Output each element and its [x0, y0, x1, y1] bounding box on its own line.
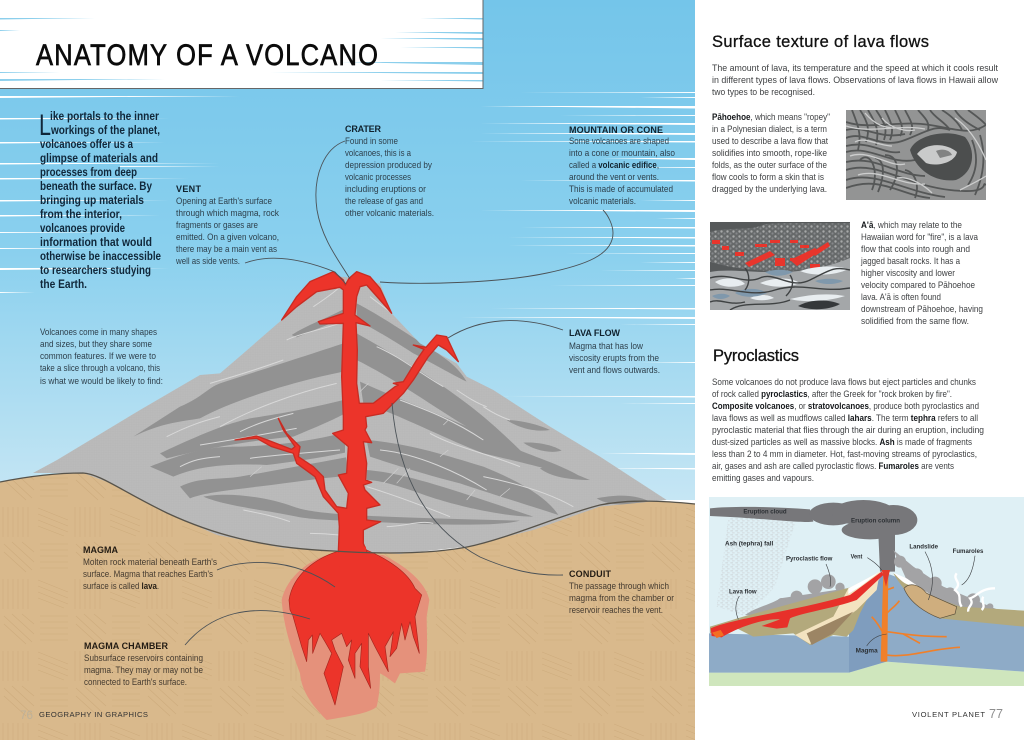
heading: surface texture: Surface texture of lava flows — [712, 33, 929, 51]
label: conduit: The passage through which — [569, 580, 669, 591]
label: magma — [83, 545, 217, 591]
text: aa: flow that cools into rough and — [861, 243, 970, 254]
text: pyroclastics: less than 2 to 4 mm in diameter. Hot, fast-moving streams of pyroclastics, — [712, 448, 977, 459]
label: lava flow: Magma that has low — [569, 340, 643, 351]
label: crater: the release of gas and — [345, 195, 423, 206]
left footer: 76 — [20, 708, 33, 722]
diagram labels: Pyroclastic flow — [786, 556, 832, 563]
text: pahoehoe: dragged by the underlying lava. — [712, 183, 827, 194]
intro text — [39, 109, 161, 291]
label: mountain or cone: called a volcanic edifice, — [569, 159, 659, 170]
label: mountain or cone: volcanic materials. — [569, 195, 636, 206]
text: pyroclastics: lava flows as well as mudflows called lahars. The term tephra refers to all — [712, 412, 978, 423]
intro text: L — [39, 109, 51, 142]
label: mountain or cone: This is made of accumulated — [569, 183, 673, 194]
label: mountain or cone: around the vent or vents. — [569, 171, 659, 182]
label: vent — [175, 184, 279, 266]
label: crater — [345, 124, 434, 218]
leader lines — [185, 141, 613, 645]
volcano cross-section — [33, 276, 666, 554]
label: magma chamber: magma. They may or may not be — [84, 664, 203, 675]
text: aa: velocity compared to Pāhoehoe — [861, 279, 975, 290]
fumaroles — [955, 573, 995, 612]
label: vent: there may be a main vent as — [176, 243, 277, 254]
label: lava flow: viscosity erupts from the — [569, 352, 659, 363]
intro text: volcanoes offer us a — [40, 138, 133, 151]
panel: title banner — [0, 0, 483, 88]
secondary intro text: take a slice through a volcano, this — [40, 362, 160, 373]
intro text: ike portals to the inner — [50, 110, 159, 123]
secondary intro text: Volcanoes come in many shapes — [40, 326, 157, 337]
left footer: GEOGRAPHY IN GRAPHICS — [39, 710, 148, 719]
text: pahoehoe — [712, 111, 830, 194]
intro text: volcanoes provide — [40, 222, 125, 235]
label: vent: through which magma, rock — [176, 207, 279, 218]
diagram labels: Fumaroles — [953, 548, 984, 555]
right clouds — [893, 550, 1000, 611]
magma chamber halo — [282, 553, 429, 720]
text: aa: lava. A'ā is often found — [861, 291, 941, 302]
label: vent: emitted. On a given volcano, — [176, 231, 279, 242]
text: lava intro: The amount of lava, its temperature and the speed at which it cools result — [712, 62, 998, 73]
text: pyroclastics: air, gases and ash are called pyroclastic flows. Fumaroles are vents — [712, 460, 954, 471]
label: conduit: CONDUIT — [569, 569, 612, 579]
right footer — [912, 707, 1003, 721]
text: lava intro: two types to be recognised. — [712, 86, 815, 97]
label: crater: including eruptions or — [345, 183, 426, 194]
label: crater: volcanic processes — [345, 171, 411, 182]
text: pyroclastics: emitting gases and vapours. — [712, 472, 814, 483]
intro text: information that would — [40, 236, 152, 249]
image: pahoehoe lava texture — [846, 110, 986, 200]
diagram labels: Lava flow — [729, 588, 757, 595]
landslide — [904, 585, 957, 618]
text: pahoehoe: folds, as the outer surface of the — [712, 159, 827, 170]
text: pahoehoe: used to describe a lava flow that — [712, 135, 828, 146]
magma conduit — [881, 572, 888, 662]
label: magma chamber: connected to Earth's surface. — [84, 676, 187, 687]
label: conduit: reservoir reaches the vent. — [569, 604, 663, 615]
secondary intro text: and sizes, but they share some — [40, 338, 152, 349]
label: magma: MAGMA — [83, 545, 118, 555]
panel: ground — [0, 473, 695, 740]
label: conduit — [569, 569, 674, 615]
text: aa: Hawaiian word for "fire", is a lava — [861, 231, 979, 242]
diagram: composite volcano — [709, 497, 1024, 687]
intro text: processes from deep — [40, 166, 137, 179]
label: vent: well as side vents. — [175, 255, 240, 266]
text: pyroclastics: Composite volcanoes, or stratovolcanoes, produce both pyroclastics and — [712, 400, 979, 411]
intro text: the Earth. — [40, 278, 87, 291]
intro text: from the interior, — [40, 208, 122, 221]
label: lava flow — [569, 328, 660, 375]
label: mountain or cone — [569, 125, 675, 206]
label: conduit: magma from the chamber or — [569, 592, 674, 603]
label: magma: surface. Magma that reaches Earth's — [83, 568, 213, 579]
secondary intro text: common features. If we were to — [40, 350, 156, 361]
label: magma: surface is called lava. — [83, 580, 159, 591]
label: lava flow: vent and flows outwards. — [569, 364, 660, 375]
label: magma: Molten rock material beneath Earth's — [83, 556, 217, 567]
diagram labels: Eruption column — [851, 517, 900, 524]
text: aa — [860, 219, 983, 326]
text: pyroclastics: of rock called pyroclastics, after the Greek for "rock broken by fire". — [712, 388, 952, 399]
pyroclastic light wedge — [795, 572, 880, 644]
label: crater: other volcanic materials. — [345, 207, 434, 218]
diagram labels: Vent — [851, 553, 863, 560]
label: mountain or cone: MOUNTAIN OR CONE — [569, 125, 663, 135]
label: magma chamber: Subsurface reservoirs containing — [84, 652, 203, 663]
label: magma chamber: MAGMA CHAMBER — [84, 641, 168, 651]
text: aa: downstream of Pāhoehoe, having — [861, 303, 983, 314]
text: aa: solidified from the same flow. — [861, 315, 969, 326]
text: pyroclastics: Some volcanoes do not produce lava flows but eject particles and chunks — [712, 376, 976, 387]
label: vent: VENT — [176, 184, 202, 194]
label: crater: volcanoes, this is a — [345, 147, 412, 158]
intro text: bringing up materials — [40, 194, 144, 207]
diagram labels: Ash (tephra) fall — [725, 541, 774, 548]
right flank — [893, 573, 1024, 627]
text: pahoehoe: in a Polynesian dialect, is a term — [712, 123, 827, 134]
callout lines — [736, 552, 975, 646]
ground surface line — [0, 473, 695, 553]
pyroclastic clouds — [745, 574, 847, 617]
text: pyroclastics: pyroclastic material that flies through the air during an eruption, including — [712, 424, 984, 435]
text: lava intro — [712, 62, 998, 97]
label: mountain or cone: Some volcanoes are shaped — [569, 135, 669, 146]
conduit and lava branches — [235, 272, 458, 567]
secondary intro text: is what we would be likely to find: — [40, 375, 163, 386]
image: aa lava texture — [710, 222, 850, 310]
left footer — [20, 708, 148, 722]
right footer: VIOLENT PLANET — [912, 710, 985, 719]
left flank — [710, 587, 866, 645]
text: aa: A'ā, which may relate to the — [861, 219, 962, 230]
diagram labels: Magma — [856, 648, 878, 655]
text: aa: higher viscosity and lower — [861, 267, 955, 278]
lava flow — [711, 572, 883, 637]
ground plane — [709, 662, 1024, 687]
intro text: glimpse of materials and — [40, 152, 158, 165]
secondary intro text — [40, 326, 163, 386]
intro text: otherwise be inaccessible — [40, 250, 161, 263]
label: lava flow: LAVA FLOW — [569, 328, 620, 338]
label: mountain or cone: into a cone or mountain, also — [569, 147, 675, 158]
label: vent: fragments or gases are — [176, 219, 258, 230]
bedrock block — [709, 573, 1024, 673]
ash fall — [717, 518, 797, 617]
title: ANATOMY OF A VOLCANO — [36, 38, 378, 71]
label: vent: Opening at Earth's surface — [176, 195, 272, 206]
text: aa: jagged basalt rocks. It has a — [860, 255, 961, 266]
label: crater: Found in some — [345, 135, 398, 146]
heading: pyroclastics: Pyroclastics — [713, 347, 799, 365]
intro text: workings of the planet, — [50, 124, 160, 137]
diagram labels: Eruption cloud — [743, 508, 787, 515]
label: magma chamber — [84, 641, 203, 687]
text: pahoehoe: Pāhoehoe, which means "ropey" — [712, 111, 830, 122]
diagram labels: Landslide — [909, 544, 938, 551]
text: lava intro: in different types of lava flows. Observations of lava flows in Hawaii allow — [712, 74, 998, 85]
text: pyroclastics — [712, 376, 984, 483]
bedrock centre face — [849, 573, 887, 673]
panel: sky background — [0, 0, 695, 500]
text: pahoehoe: flow cools to form a skin that is — [712, 171, 824, 182]
text: pahoehoe: solidifies into smooth, rope-like — [712, 147, 827, 158]
intro text: beneath the surface. By — [40, 180, 152, 193]
diagram labels — [725, 508, 984, 655]
text: pyroclastics: dust-sized particles as well as massive blocks. Ash is made of fragments — [712, 436, 972, 447]
right footer: 77 — [989, 707, 1003, 721]
label: crater: depression produced by — [345, 159, 432, 170]
eruption cloud — [710, 500, 917, 572]
label: crater: CRATER — [345, 124, 382, 134]
intro text: to researchers studying — [40, 264, 151, 277]
magma chamber — [289, 550, 422, 705]
